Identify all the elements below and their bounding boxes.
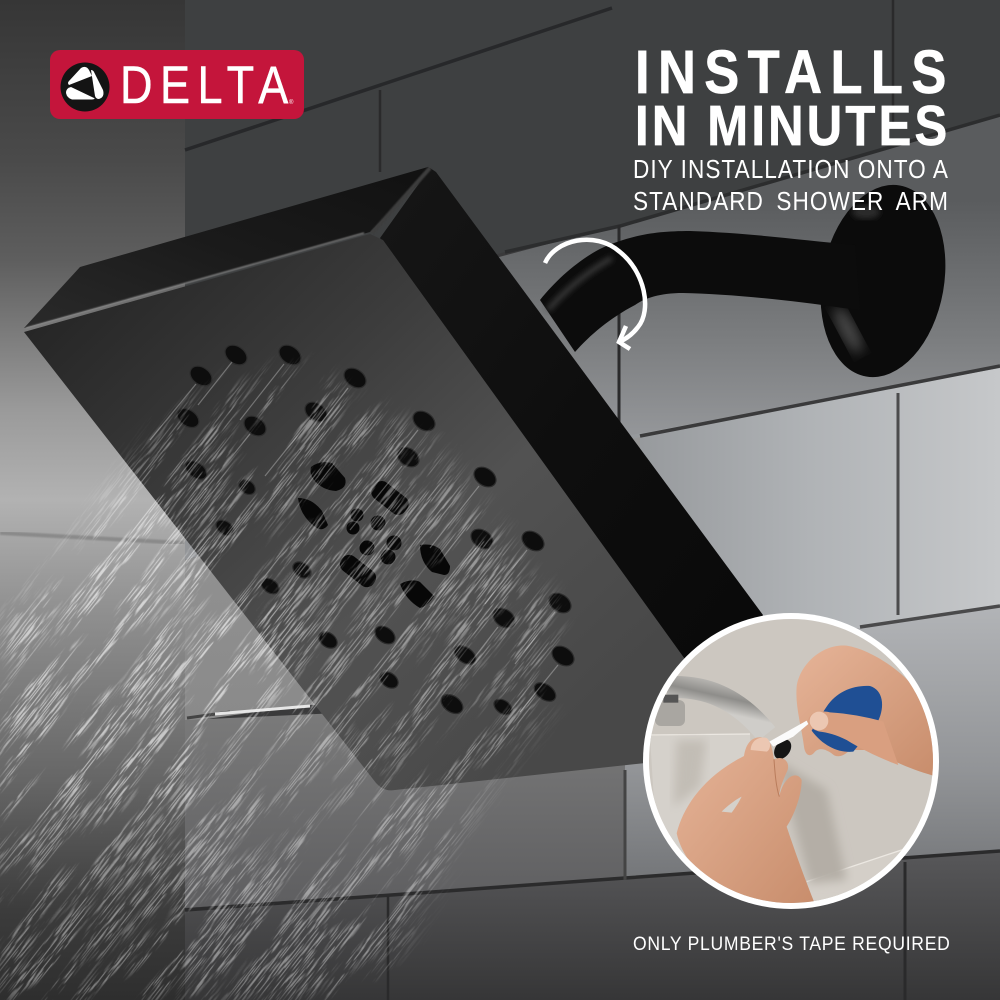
tape	[769, 721, 808, 747]
center spray pads	[298, 462, 450, 608]
water spray	[0, 358, 566, 1000]
shower arm pipe	[667, 687, 767, 734]
heading: Installs in minutes: IN MINUTES	[635, 95, 947, 158]
logo: Delta: ®	[289, 99, 294, 106]
flange	[806, 175, 960, 387]
subheading text	[633, 156, 949, 216]
left tile column	[0, 0, 185, 1000]
logo: Delta	[50, 50, 304, 119]
subheading text: STANDARD SHOWER ARM	[633, 188, 948, 216]
nozzle jets	[150, 362, 558, 712]
icon: Delta triangle	[60, 62, 110, 112]
side face	[380, 168, 763, 700]
heading: Installs in minutes	[635, 38, 947, 158]
caption: ONLY PLUMBER'S TAPE REQUIRED	[633, 932, 950, 954]
callout photo: applying plumber's tape	[643, 613, 939, 909]
top face	[24, 167, 432, 328]
wordmark: DELTA	[120, 56, 288, 115]
blue ball	[812, 686, 882, 752]
icon: rotation arrow	[545, 240, 645, 349]
lower tile and seam	[650, 735, 750, 856]
subheading text: DIY INSTALLATION ONTO A	[633, 156, 949, 184]
pipe end	[774, 740, 792, 758]
front face	[24, 234, 720, 790]
heading: Installs in minutes: INSTALLS	[635, 38, 946, 107]
nozzles	[174, 341, 578, 718]
shower arm and wall flange	[540, 175, 960, 387]
thumb	[808, 711, 898, 765]
shadows	[777, 760, 847, 883]
arm	[540, 231, 860, 352]
left hand	[677, 737, 814, 907]
right hand back	[796, 645, 935, 776]
shower head	[24, 167, 763, 790]
